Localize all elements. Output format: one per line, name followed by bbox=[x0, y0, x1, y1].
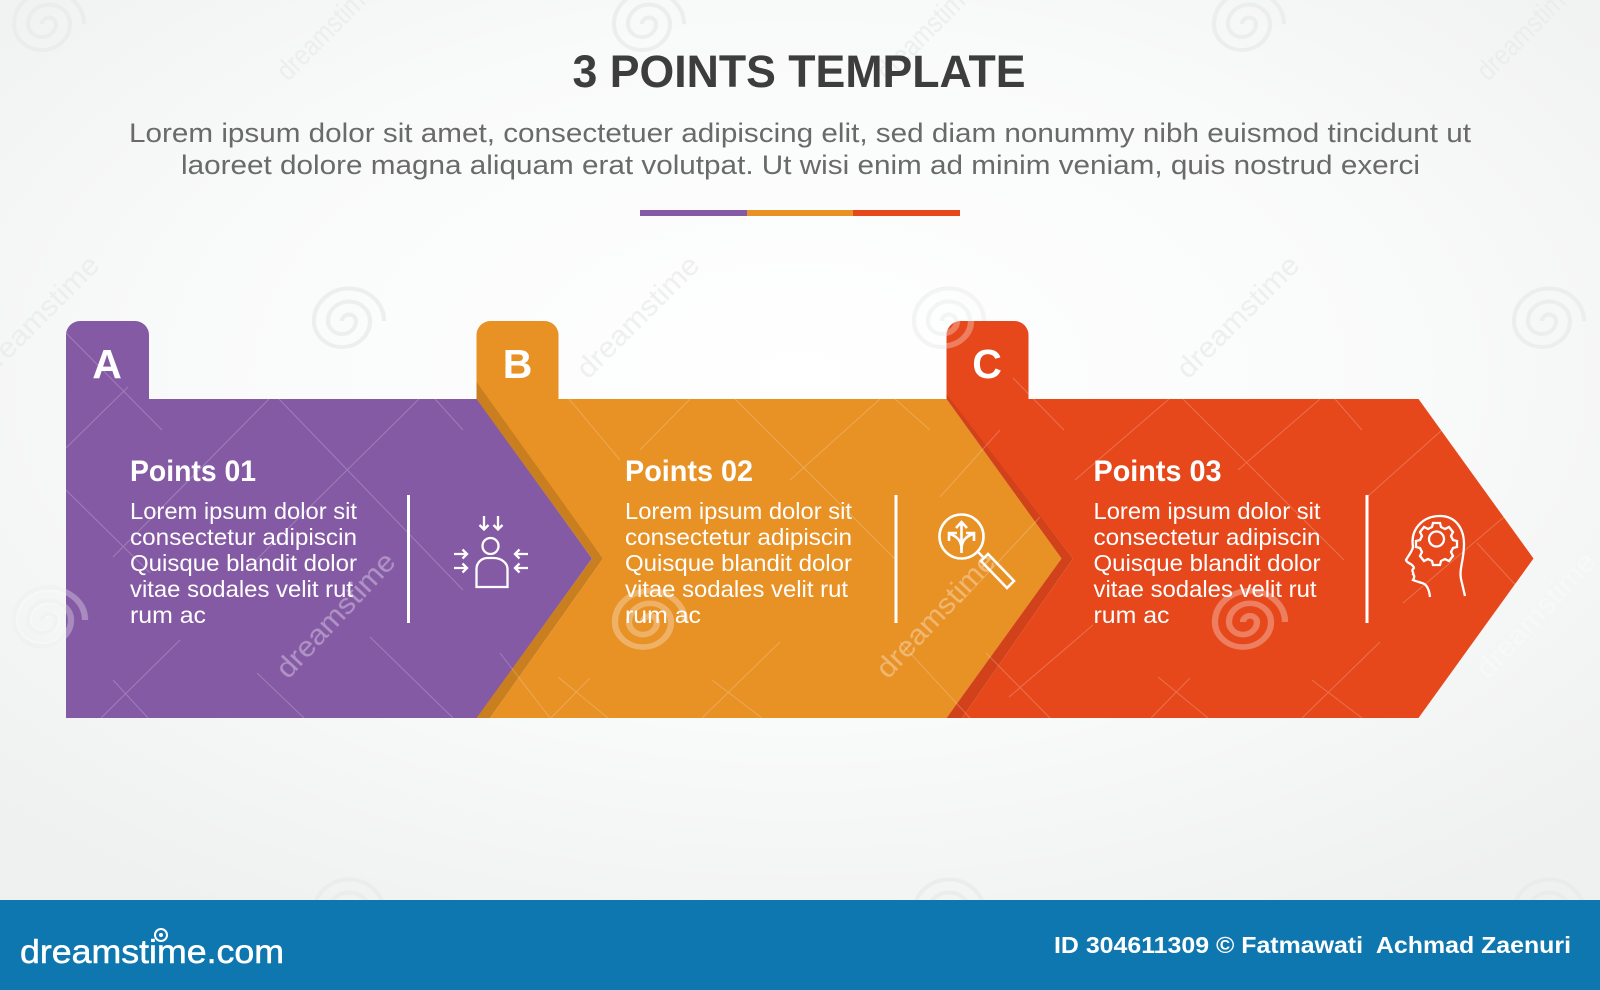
watermark text marks: dreamstime bbox=[870, 546, 1002, 685]
subtitle text: Lorem ipsum dolor sit amet, consectetuer adipiscing elit, sed diam nonummy nibh euismod tincidunt ut bbox=[129, 118, 1472, 148]
point 01 text: consectetur adipiscin bbox=[130, 524, 357, 550]
point 01 text: rum ac bbox=[130, 602, 206, 628]
panel: point B orange arrow bbox=[476, 321, 1062, 718]
point 01 text: vitae sodales velit rut bbox=[130, 576, 354, 602]
point 03 text: Points 03 bbox=[1094, 455, 1222, 488]
title: 3 POINTS TEMPLATE bbox=[572, 46, 1026, 97]
point 03 text: Lorem ipsum dolor sit bbox=[1094, 498, 1321, 524]
panel: point C shadow bbox=[946, 393, 1073, 718]
vertical separators bbox=[407, 495, 1368, 623]
watermark text on background: dreamstime bbox=[1170, 249, 1306, 385]
watermark text on background bbox=[0, 0, 1581, 385]
subtitle text: laoreet dolore magna aliquam erat volutpat. Ut wisi enim ad minim veniam, quis nostrud exerci bbox=[181, 150, 1420, 180]
watermark text marks: dreamstime bbox=[1470, 546, 1600, 685]
tri-colour divider bbox=[640, 210, 960, 216]
icon: head with gear bbox=[1406, 516, 1465, 597]
point 01 text: Quisque blandit dolor bbox=[130, 550, 357, 576]
point 03 text: vitae sodales velit rut bbox=[1094, 576, 1317, 602]
badge letter A: A bbox=[92, 341, 122, 387]
panel: point B shadow bbox=[476, 380, 603, 718]
point 02 text: Lorem ipsum dolor sit bbox=[625, 498, 853, 524]
icon: person with converging arrows bbox=[454, 516, 528, 587]
badge letter C: C bbox=[972, 341, 1002, 387]
point 02 text: rum ac bbox=[625, 602, 701, 628]
watermark text marks: dreamstime bbox=[270, 546, 402, 685]
watermark text on background: dreamstime bbox=[570, 249, 706, 385]
point 03 text bbox=[1094, 455, 1321, 628]
watermark spirals over arrows bbox=[15, 290, 1285, 647]
point 03 text: consectetur adipiscin bbox=[1094, 524, 1320, 550]
panel: point C red arrow bbox=[946, 321, 1534, 718]
footer logo: dreamstime.com bbox=[20, 933, 284, 970]
point 02 text: Quisque blandit dolor bbox=[625, 550, 852, 576]
point 02 text: vitae sodales velit rut bbox=[625, 576, 849, 602]
point 01 text: Lorem ipsum dolor sit bbox=[130, 498, 358, 524]
footer credit: ID 304611309 © Fatmawati Achmad Zaenuri bbox=[1054, 932, 1571, 958]
point 01 text bbox=[130, 455, 358, 628]
point 02 text bbox=[625, 455, 853, 628]
point 02 text: Points 02 bbox=[625, 455, 753, 488]
watermark text marks bbox=[270, 546, 1600, 685]
point 01 text: Points 01 bbox=[130, 455, 256, 488]
footer bar bbox=[0, 900, 1600, 990]
point 03 text: rum ac bbox=[1094, 602, 1170, 628]
panel: point A purple arrow bbox=[66, 321, 592, 718]
point 03 text: Quisque blandit dolor bbox=[1094, 550, 1321, 576]
icon: magnifier with branching arrows bbox=[940, 514, 1014, 588]
watermark diagonal lines bbox=[66, 333, 1520, 718]
badge letter B: B bbox=[503, 341, 532, 387]
point 02 text: consectetur adipiscin bbox=[625, 524, 852, 550]
subtitle text bbox=[129, 118, 1472, 180]
